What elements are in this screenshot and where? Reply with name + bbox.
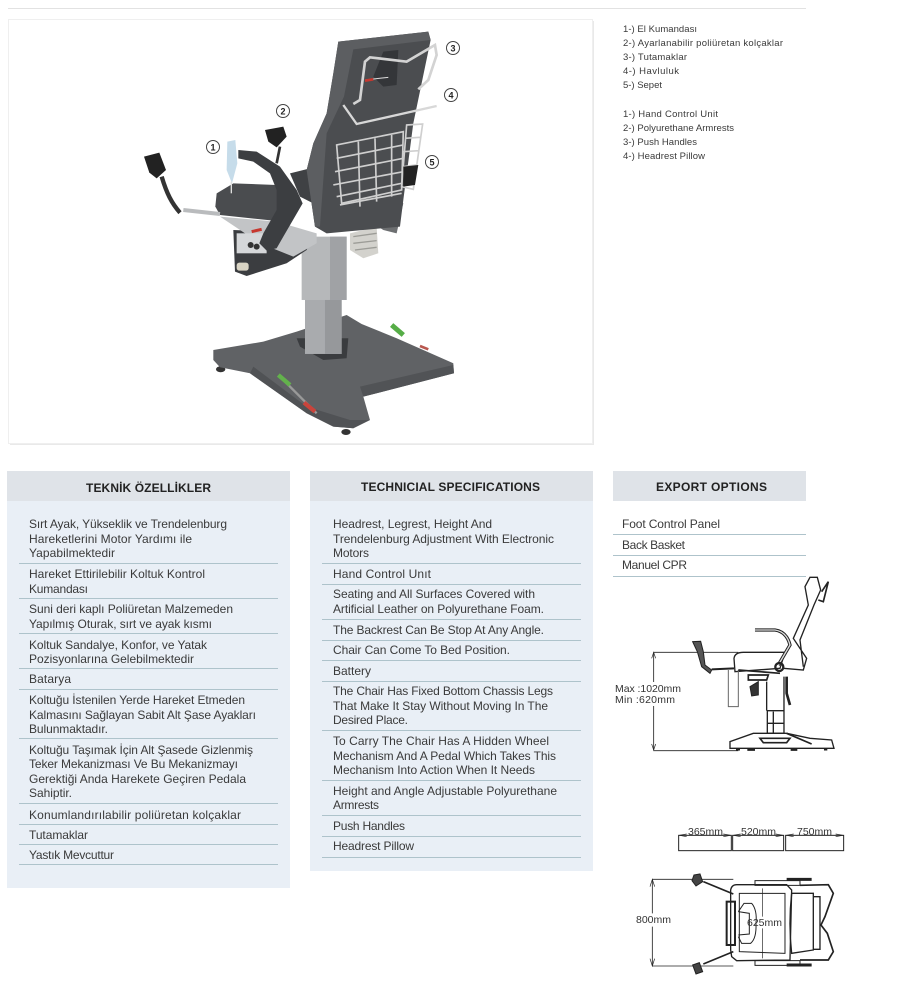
legend: English part names: 1-) Hand Control Unit bbox=[623, 109, 718, 120]
callout 4 bbox=[444, 88, 458, 102]
callout 1: 1 bbox=[210, 142, 216, 152]
list: Turkish features: Koltuğu İstenilen Yerde Hareket Etmeden bbox=[29, 693, 245, 707]
list: Turkish features: Yastık Mevcuttur bbox=[29, 848, 114, 862]
callout 5 bbox=[426, 156, 438, 168]
list: Turkish features: Bulunmaktadır. bbox=[29, 722, 108, 736]
panel: export options bbox=[613, 471, 806, 576]
list: Turkish features: Yapılmış Oturak, sırt ve ayak kısmı bbox=[29, 617, 212, 631]
label: height range: Max :1020mm bbox=[615, 683, 681, 695]
list: Turkish features: Yapabilmektedir bbox=[29, 546, 115, 560]
heading: TECHNICIAL SPECIFICATIONS: TECHNICIAL SPECIFICATIONS bbox=[361, 480, 540, 494]
label: height range bbox=[615, 682, 685, 706]
list: English specifications: Mechanism Into Action When It Needs bbox=[333, 763, 535, 777]
legend: Turkish part names: 5-) Sepet bbox=[623, 80, 662, 91]
list: English specifications: Push Handles bbox=[333, 819, 405, 833]
legend: Turkish part names: 1-) El Kumandası bbox=[623, 24, 697, 35]
label: width 365mm: 365mm bbox=[688, 826, 723, 838]
list: English specifications: Trendelenburg Adjustment With Electronic bbox=[333, 532, 554, 546]
list: Turkish features: Koltuk Sandalye, Konfor, ve Yatak bbox=[29, 638, 208, 652]
list: Turkish features: Gerektiği Anda Harekete Geçiren Pedala bbox=[29, 772, 246, 786]
list: English specifications: Motors bbox=[333, 546, 369, 560]
list: export options: Back Basket bbox=[622, 538, 686, 552]
heading: TEKNİK ÖZELLİKLER: TEKNİK ÖZELLİKLER bbox=[86, 480, 211, 495]
panel: product photo bbox=[8, 20, 594, 445]
list: Turkish features: Kalmasını Sağlayan Sabit Alt Şase Ayakları bbox=[29, 708, 256, 722]
legend: Turkish part names: 4-) Havluluk bbox=[623, 66, 679, 77]
list: Turkish features: Koltuğu Taşımak İçin Alt Şasede Gizlenmiş bbox=[29, 743, 253, 757]
list: English specifications: Hand Control Unıt bbox=[333, 567, 432, 581]
list: English specifications: Headrest Pillow bbox=[333, 839, 414, 853]
list: English specifications: The Backrest Can Be Stop At Any Angle. bbox=[333, 623, 544, 637]
list: Turkish features: Pozisyonlarına Gelebilmektedir bbox=[29, 652, 194, 666]
list: English specifications: Seating and All Surfaces Covered with bbox=[333, 587, 535, 601]
list: Turkish features: Batarya bbox=[29, 672, 71, 686]
list: English specifications: To Carry The Chair Has A Hidden Wheel bbox=[333, 734, 549, 748]
legend: English part names bbox=[623, 109, 734, 162]
list: English specifications: Battery bbox=[333, 664, 371, 678]
list: English specifications: Mechanism And A Pedal Which Takes This bbox=[333, 749, 556, 763]
callout 3 bbox=[446, 42, 460, 54]
callout 1 bbox=[206, 140, 220, 154]
panel: Turkish technical features bbox=[7, 471, 290, 888]
list: English specifications: That Make It Stay Without Moving In The bbox=[333, 699, 548, 713]
list: English specifications: Artificial Leather on Polyurethane Foam. bbox=[333, 602, 544, 616]
list: Turkish features: Konumlandırılabilir poliüretan kolçaklar bbox=[29, 808, 241, 822]
list: English specifications: Chair Can Come To Bed Position. bbox=[333, 643, 510, 657]
label: width 750mm: 750mm bbox=[797, 826, 832, 838]
list: Turkish features: Hareketlerini Motor Yardımı ile bbox=[29, 532, 192, 546]
list: English specifications: Armrests bbox=[333, 798, 379, 812]
list: Turkish features: Teker Mekanizması Ve Bu Mekanizmayı bbox=[29, 757, 238, 771]
list: English specifications: Desired Place. bbox=[333, 713, 408, 727]
legend: Turkish part names: 2-) Ayarlanabilir poliüretan kolçaklar bbox=[623, 38, 783, 49]
list: Turkish features: Sahiptir. bbox=[29, 786, 72, 800]
legend: Turkish part names: 3-) Tutamaklar bbox=[623, 52, 687, 63]
diagram: side view with height range bbox=[615, 577, 834, 751]
list: English specifications bbox=[322, 517, 581, 858]
callout 5: 5 bbox=[429, 158, 435, 168]
list: Turkish features: Sırt Ayak, Yükseklik ve Trendelenburg bbox=[29, 517, 227, 531]
list: Turkish features: Hareket Ettirilebilir Koltuk Kontrol bbox=[29, 567, 205, 581]
list: English specifications: The Chair Has Fixed Bottom Chassis Legs bbox=[333, 684, 553, 698]
label: width 520mm: 520mm bbox=[741, 826, 776, 838]
list: export options bbox=[613, 517, 806, 576]
legend: English part names: 3-) Push Handles bbox=[623, 137, 697, 148]
list: Turkish features: Kumandası bbox=[29, 582, 88, 596]
callout 4: 4 bbox=[448, 90, 454, 100]
callout 3: 3 bbox=[450, 44, 456, 54]
list: Turkish features: Suni deri kaplı Poliüretan Malzemeden bbox=[29, 602, 233, 616]
list: Turkish features bbox=[19, 517, 278, 864]
list: export options: Foot Control Panel bbox=[622, 517, 720, 531]
heading: EXPORT OPTIONS: EXPORT OPTIONS bbox=[656, 480, 767, 494]
legend: Turkish part names bbox=[623, 24, 783, 91]
label: width 625mm: 625mm bbox=[747, 917, 782, 929]
legend: English part names: 2-) Polyurethane Armrests bbox=[623, 123, 734, 134]
callout 2 bbox=[276, 104, 290, 118]
label: height range: Min :620mm bbox=[615, 694, 675, 706]
legend: English part names: 4-) Headrest Pillow bbox=[623, 151, 705, 162]
label: width 800mm: 800mm bbox=[636, 914, 671, 926]
illustration: examination chair bbox=[144, 32, 454, 435]
diagram: top view with dimensions bbox=[636, 826, 844, 974]
callout 2: 2 bbox=[280, 106, 286, 116]
list: Turkish features: Tutamaklar bbox=[29, 828, 88, 842]
list: export options: Manuel CPR bbox=[622, 558, 687, 572]
list: English specifications: Headrest, Legrest, Height And bbox=[333, 517, 492, 531]
panel: English technical specifications bbox=[310, 471, 593, 871]
list: English specifications: Height and Angle Adjustable Polyurethane bbox=[333, 784, 557, 798]
